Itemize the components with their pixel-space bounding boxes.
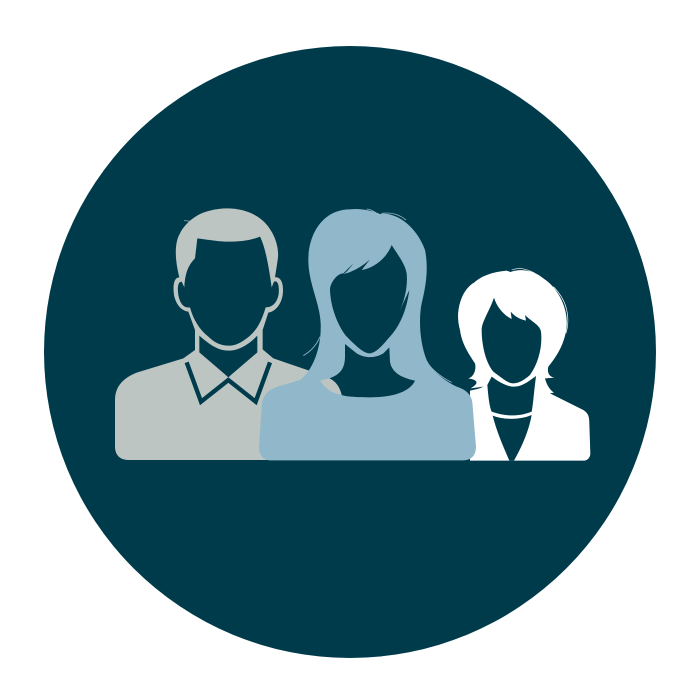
icon: man (grey, left): [115, 208, 327, 460]
icon: woman with long hair (blue, centre): [259, 209, 476, 460]
short hair and jacket silhouette: [458, 270, 590, 461]
icon: woman with short hair (white, right): [458, 269, 590, 461]
face: [330, 245, 409, 353]
shirt collar: [187, 362, 270, 402]
face: [482, 298, 541, 383]
blouse V-neck: [493, 415, 532, 461]
stray hair strands: [459, 269, 568, 333]
neck: [199, 336, 257, 377]
overlapping grey shoulder sliver: [320, 378, 342, 395]
neck and chest: [329, 344, 415, 397]
neck: [487, 376, 536, 415]
background circle: [44, 46, 656, 658]
torso, neck and head silhouette: [115, 208, 327, 460]
face and ears: [178, 237, 279, 346]
stray hair strands: [184, 220, 195, 221]
long hair and torso silhouette: [259, 209, 476, 460]
stray hair strands: [303, 209, 452, 382]
